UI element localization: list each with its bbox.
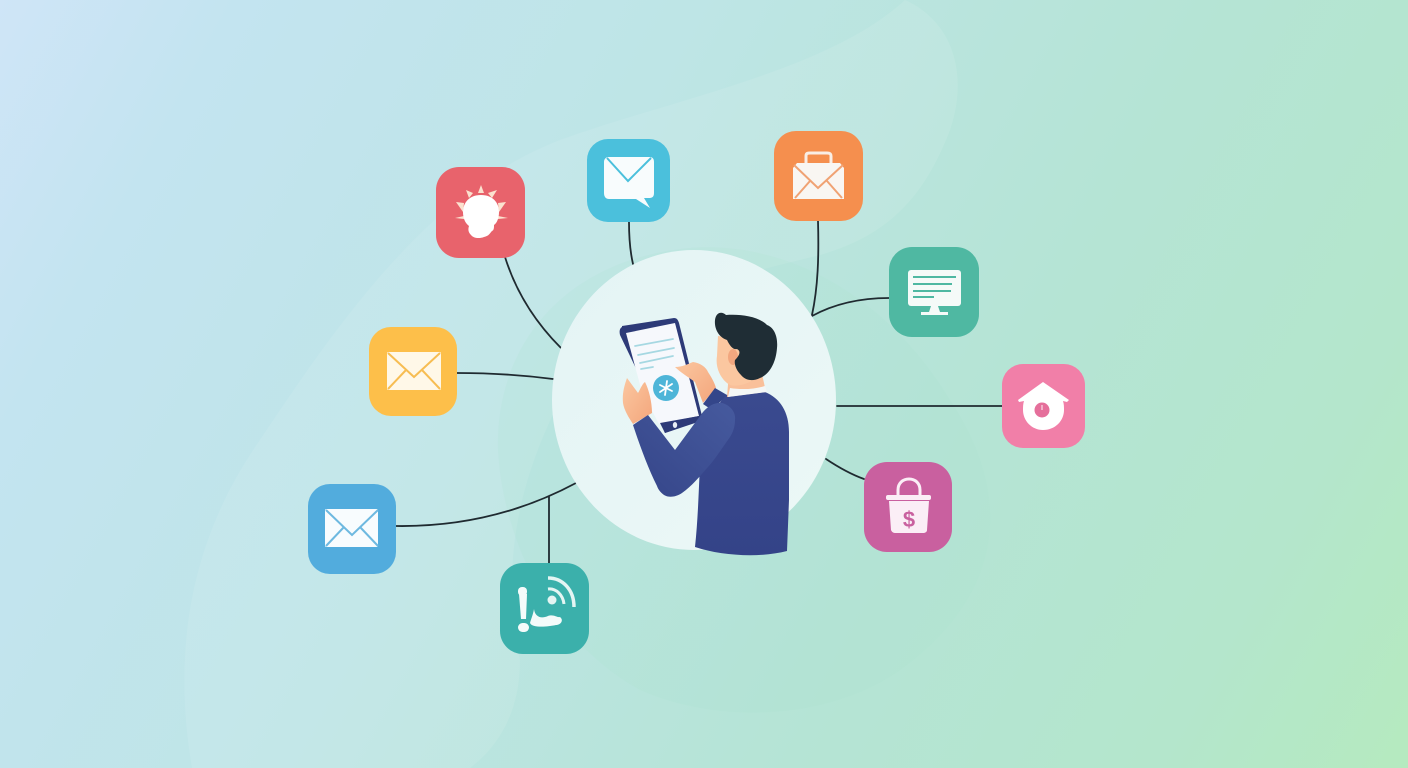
hair (715, 313, 777, 380)
icon: purple shopping bag (864, 462, 952, 552)
background blobs (184, 0, 990, 768)
head and ear (717, 336, 760, 386)
person reading a tablet (620, 313, 789, 555)
icon: pink home (1002, 364, 1085, 448)
tablet screen (626, 323, 699, 424)
tablet bottom bar (660, 416, 702, 433)
icon: cyan chat envelope (587, 139, 670, 222)
left hand (623, 378, 652, 424)
hand on stylus side (675, 362, 716, 403)
dollar sign: $ (903, 507, 915, 532)
icon: green monitor (889, 247, 979, 337)
person torso (695, 392, 789, 555)
icon: orange envelope briefcase (774, 131, 863, 221)
connector lines (396, 221, 1002, 563)
central circle (552, 250, 836, 550)
icon: yellow envelope (369, 327, 457, 416)
tablet (620, 318, 702, 433)
icon: red light bulb (436, 167, 525, 258)
icon: teal signal (500, 563, 589, 654)
neck and collar (727, 372, 767, 397)
icon: blue envelope (308, 484, 396, 574)
forearm sleeve (633, 403, 735, 497)
screen badge (653, 375, 679, 401)
screen text lines (635, 339, 674, 369)
upright sleeve (703, 388, 727, 410)
